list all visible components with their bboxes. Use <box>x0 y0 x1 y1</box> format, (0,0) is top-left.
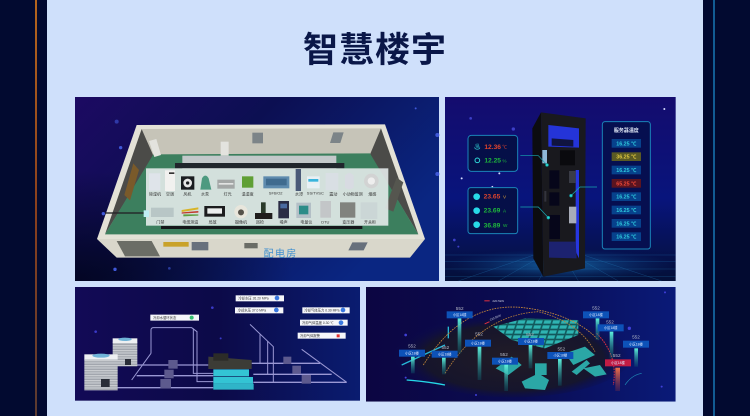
tag values: 552 <box>632 335 640 340</box>
server temperature list: 36.25 ℃ <box>616 154 637 161</box>
floor grid glow <box>445 108 676 281</box>
icon row two labels: 电缆测温 <box>182 219 198 225</box>
icon row one labels: 风机 <box>183 190 191 196</box>
icon row one labels: SS/TVSC <box>307 191 324 196</box>
arc labels: 220.5kW <box>492 299 504 303</box>
status callouts <box>150 295 350 339</box>
server temperature list: 16.25 ℃ <box>616 234 637 241</box>
room model <box>97 124 425 258</box>
status callouts: 冷却水循环状态 <box>153 315 177 320</box>
server temperature list: 16.25 ℃ <box>616 140 637 147</box>
environment readout box: ♨ <box>474 143 481 151</box>
icon row one labels: 水浸 <box>295 190 303 196</box>
status callouts: 冷却气体压力 0.30 MPa <box>304 308 340 313</box>
location tags: 小区18楼 <box>405 350 420 355</box>
connector lines <box>520 156 597 219</box>
server temperature list: 服务器温度 <box>614 127 639 134</box>
chiller units <box>208 353 254 390</box>
pipe network <box>117 324 347 388</box>
room name label: 配电房 <box>264 247 298 260</box>
location tags: 小区18楼 <box>453 312 467 317</box>
icon row two labels <box>156 219 376 225</box>
icon row two labels: 巡检 <box>256 219 264 225</box>
arc labels: 220.5kW <box>489 313 502 322</box>
icon row one labels: SF6/O2 <box>269 191 283 196</box>
icon row one labels: 灯光 <box>224 190 232 196</box>
panel: smart city map <box>366 287 676 402</box>
environment readout box: ℃ <box>502 145 507 150</box>
icon row two labels: 摄像机 <box>235 219 247 225</box>
icon row one labels: 温湿度 <box>242 190 254 196</box>
environment readout box: 12.25 <box>484 158 501 165</box>
icon row one <box>149 169 379 191</box>
icon row one labels: 空调 <box>166 190 174 196</box>
panel: server cabinet monitoring <box>445 97 676 281</box>
server cabinet <box>532 112 586 277</box>
location tags: 小区18楼 <box>604 325 618 330</box>
tag values: 552 <box>557 346 566 351</box>
tag values: 552 <box>606 319 614 324</box>
location tags: 小区18楼 <box>629 341 644 346</box>
stars <box>404 291 666 396</box>
environment readout box: % <box>502 158 506 163</box>
power readout box: 36.89 <box>484 222 501 229</box>
status callouts: 冷却气体报警 <box>300 333 321 338</box>
tag values: 552 <box>592 305 600 310</box>
location tags: 小区18楼 <box>438 351 452 356</box>
icon row one labels: 震动 <box>329 190 337 196</box>
arc labels <box>484 299 504 324</box>
power readout box: V <box>503 194 507 199</box>
tag values <box>408 305 640 358</box>
status callouts: 冷却水压 37.0 MPa <box>238 308 266 313</box>
tag values: 552 <box>408 343 416 348</box>
tag values: 552 <box>456 306 464 311</box>
right blue edge line <box>713 0 715 416</box>
icon row one labels: 烟感 <box>368 190 376 196</box>
stars <box>94 306 222 339</box>
route arcs <box>423 307 614 385</box>
marker pillars <box>411 318 638 391</box>
icon row two labels: 噪声 <box>280 219 288 225</box>
title: 智慧楼宇 <box>303 31 447 70</box>
power readout box: A <box>503 208 507 213</box>
pumps <box>160 357 311 388</box>
tag values: 552 <box>613 353 621 358</box>
icon row one labels: 水泵 <box>201 190 209 196</box>
server temperature list: 16.25 ℃ <box>616 167 637 174</box>
stars <box>102 107 439 271</box>
icon row one labels: 小动物监测 <box>343 190 363 196</box>
panel: power distribution room <box>75 97 439 281</box>
icon row two labels: DTU <box>321 220 330 225</box>
icon row two <box>144 201 377 219</box>
power readout box: 23.69 <box>484 208 501 215</box>
status callouts: 冷却水压 26.20 MPa <box>238 296 269 301</box>
server temperature list <box>602 122 650 249</box>
panel: HVAC piping system <box>75 287 360 401</box>
location tags <box>399 311 649 366</box>
power readout box: W <box>503 223 508 228</box>
icon row one labels <box>149 190 376 196</box>
tag values: 552 <box>500 352 508 357</box>
environment readout box: 12.36 <box>484 144 501 151</box>
icon row two labels: 电量仪 <box>300 219 312 225</box>
city base <box>401 318 642 396</box>
server temperature list: 16.25 ℃ <box>616 207 637 214</box>
icon row two labels: 变压器 <box>342 219 354 225</box>
power readout box <box>468 188 518 234</box>
tag values: 552 <box>526 332 534 337</box>
icon row one labels: 除湿机 <box>149 190 161 196</box>
location tags: 小区18楼 <box>553 353 568 358</box>
location tags: 小区18楼 <box>611 360 626 365</box>
power readout box: 23.65 <box>484 194 501 201</box>
location tags: 小区18楼 <box>498 358 513 363</box>
status callouts: 冷却气体温度 0.30 ℃ <box>302 320 334 325</box>
icon row two labels: 局放 <box>209 219 217 225</box>
location tags: 小区18楼 <box>471 340 486 345</box>
tag values: 552 <box>441 345 450 350</box>
device overlay panel <box>144 168 388 226</box>
location tags: 小区18楼 <box>524 339 539 344</box>
tag values: 552 <box>475 331 483 336</box>
icon row two labels: 开关柜 <box>364 219 376 225</box>
left orange edge line <box>35 0 37 416</box>
environment readout box <box>468 135 518 171</box>
server temperature list: 16.25 ℃ <box>616 220 637 227</box>
cooling towers <box>84 338 137 390</box>
location tags: 小区18楼 <box>589 312 604 317</box>
server temperature list: 16.25 ℃ <box>616 194 637 201</box>
icon row two labels: 门禁 <box>156 219 164 225</box>
server temperature list: 65.25 ℃ <box>616 180 637 187</box>
